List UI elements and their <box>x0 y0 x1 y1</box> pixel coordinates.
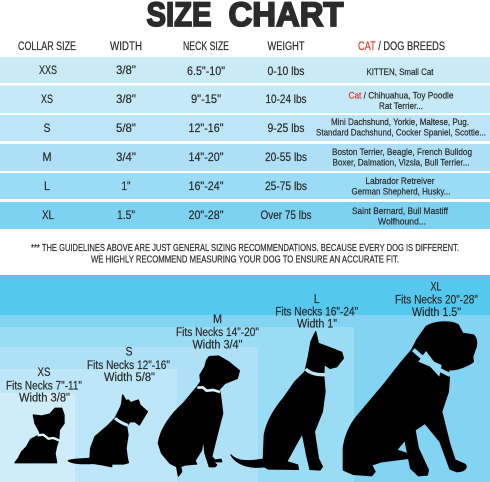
table row: M: M <box>42 150 52 164</box>
table row: XS: Cat / Chihuahua, Toy Poodle <box>348 90 454 102</box>
table row: XS: 9"-15" <box>191 92 221 106</box>
table row: L: Labrador Retreiver <box>366 176 435 187</box>
label: XL: Width 1.5" <box>412 307 461 319</box>
table row: L <box>0 173 490 199</box>
table row: XS: 3/8" <box>116 92 136 106</box>
table row: XL: XL <box>42 208 54 222</box>
table row: XL: 1.5" <box>117 208 135 222</box>
label: XS <box>6 367 82 404</box>
panel: nested size backgrounds <box>0 275 490 482</box>
disclaimer note: WE HIGHLY RECOMMEND MEASURING YOUR DOG TO ENSURE AN ACCURATE FIT. <box>91 254 399 266</box>
table row: XXS: 6.5"-10" <box>187 64 225 78</box>
table row: XL: Saint Bernard, Bull Mastiff <box>352 206 448 217</box>
table row: XL: Wolfhound... <box>378 216 426 228</box>
table row: XS: XS <box>41 92 53 106</box>
icon: L dog with collar <box>231 332 343 470</box>
table header row: WEIGHT <box>268 41 304 53</box>
label: XL: Fits Necks 20"-28" <box>395 294 478 306</box>
title <box>146 0 344 34</box>
table row: M: 20-55 lbs <box>265 150 307 164</box>
icon: XS dog with bow <box>15 408 64 463</box>
table row: M: Boxer, Dalmation, Vizsla, Bull Terrier... <box>332 158 470 168</box>
table row: XXS: 0-10 lbs <box>268 64 304 78</box>
table header row: COLLAR SIZE <box>18 41 76 53</box>
label: L: Width 1" <box>297 318 337 330</box>
table row: L: 1" <box>122 179 130 193</box>
label: XL: XL <box>430 282 442 294</box>
table row: XL <box>0 202 490 229</box>
table row: S <box>0 115 490 141</box>
label: M: M <box>213 314 222 326</box>
table row: XXS: KITTEN, Small Cat <box>366 67 434 78</box>
icon: S dog with collar <box>68 395 147 467</box>
disclaimer note <box>31 243 459 266</box>
label: XS: Fits Necks 7"-11" <box>6 380 82 392</box>
table header row: NECK SIZE <box>183 41 229 53</box>
table header row: CAT / DOG BREEDS <box>358 41 445 53</box>
table row: XS <box>0 86 490 113</box>
label: S: Width 5/8" <box>104 372 155 384</box>
table row: L: 16"-24" <box>188 179 224 193</box>
table row: M: 3/4" <box>116 150 136 164</box>
table row: XXS: 3/8" <box>116 63 136 77</box>
table row: S: S <box>44 121 50 135</box>
table row: XS: Rat Terrier... <box>379 101 423 112</box>
icon: M dog with collar <box>158 356 239 476</box>
label: S <box>87 346 170 384</box>
label: M: Fits Necks 14"-20" <box>176 327 259 339</box>
table row: L: 25-75 lbs <box>265 179 307 193</box>
table row: S: 9-25 lbs <box>268 121 304 135</box>
table row: M: 14"-20" <box>188 150 224 164</box>
table row: XXS <box>0 57 490 83</box>
label: XL <box>395 282 478 319</box>
label: S: S <box>126 346 133 358</box>
icon: XL dog with bow <box>343 322 477 476</box>
table row: XS: 10-24 lbs <box>266 92 306 106</box>
table row: XXS: XXS <box>39 63 57 77</box>
table header row: WIDTH <box>110 41 142 53</box>
table header row <box>18 41 445 53</box>
label: L <box>275 294 358 330</box>
table row: XL: 20"-28" <box>188 208 224 222</box>
label: M <box>176 314 259 352</box>
table row: XL: Over 75 lbs <box>260 208 312 222</box>
table row: M <box>0 144 490 171</box>
table row: L: L <box>44 179 50 193</box>
label: M: Width 3/4" <box>192 340 242 352</box>
label: L: L <box>314 294 320 306</box>
label: S: Fits Necks 12"-16" <box>87 360 170 372</box>
table row: S: 12"-16" <box>188 121 224 135</box>
label: XS: XS <box>38 367 51 379</box>
table row: S: 5/8" <box>116 121 136 135</box>
label: XS: Width 3/8" <box>19 392 70 404</box>
label: L: Fits Necks 16"-24" <box>275 306 358 318</box>
table row: L: German Shepherd, Husky... <box>352 186 450 198</box>
